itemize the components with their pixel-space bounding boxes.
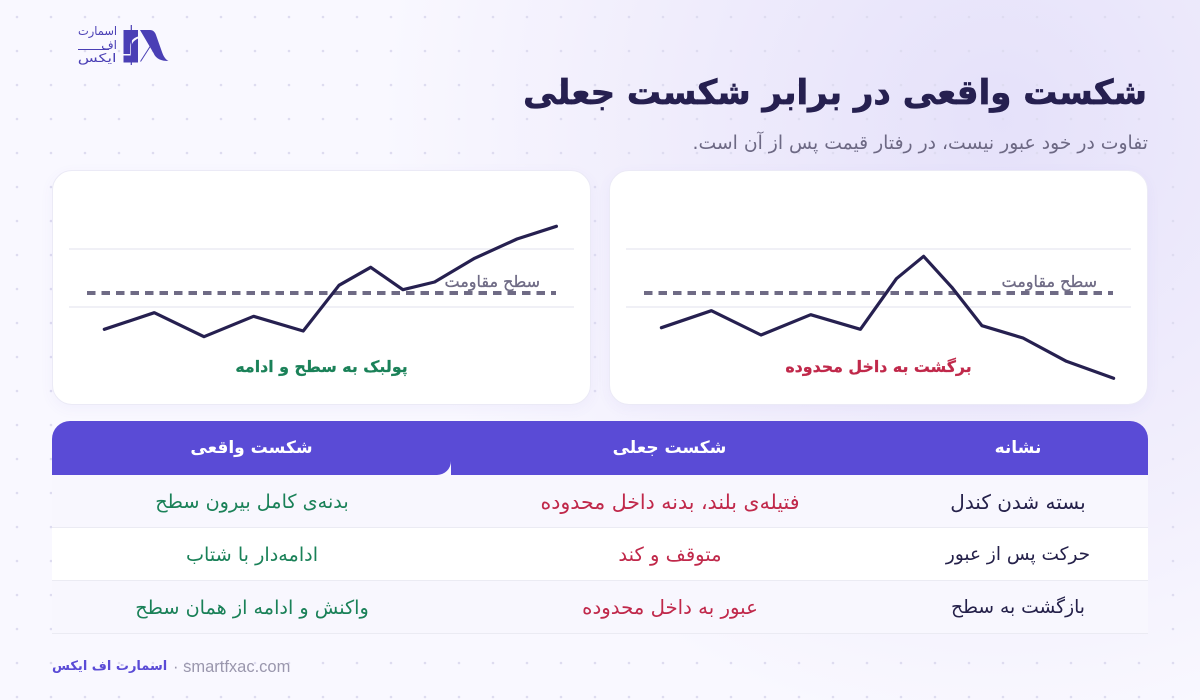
row: return to level: واکنش و ادامه از همان سطح <box>135 596 369 619</box>
table header <box>52 421 1148 475</box>
logo mark <box>124 25 168 65</box>
header cell: fake breakout: شکست جعلی <box>613 438 726 458</box>
row: candle close: بسته شدن کندل <box>950 490 1086 514</box>
chart: real breakout: سطح مقاومت <box>444 272 540 292</box>
footer <box>52 658 290 676</box>
row: move after crossing: حرکت پس از عبور <box>946 544 1090 565</box>
subtitle: تفاوت در خود عبور نیست، در رفتار قیمت پس از آن است. <box>692 133 1148 154</box>
header cell: real breakout <box>52 421 451 475</box>
logo wordmark: اسمارت <box>78 24 117 38</box>
chart: fake breakout: سطح مقاومت <box>1002 272 1097 292</box>
header cell: sign <box>888 421 1148 475</box>
logo wordmark: اف <box>101 38 117 52</box>
header cell: real breakout: شکست واقعی <box>190 438 313 458</box>
chart: fake breakout <box>626 248 1131 380</box>
row: candle close: بدنه‌ی کامل بیرون سطح <box>155 490 349 513</box>
row: return to level: عبور به داخل محدوده <box>582 596 758 619</box>
row: return to level: بازگشت به سطح <box>951 597 1085 618</box>
caption: fake breakout: برگشت به داخل محدوده <box>785 357 972 376</box>
panel: fake breakout <box>609 170 1148 405</box>
footer brand: اسمارت اف ایکس <box>52 659 167 674</box>
row: move after crossing: ادامه‌دار با شتاب <box>186 543 318 566</box>
footer url: · smartfxac.com <box>173 658 290 676</box>
header cell: sign: نشانه <box>995 438 1041 458</box>
logo wordmark: ایکس <box>78 51 117 65</box>
row: move after crossing <box>52 528 1148 581</box>
row: return to level <box>52 581 1148 634</box>
row: candle close: فتیله‌ی بلند، بدنه داخل محدوده <box>540 490 800 514</box>
logo <box>78 24 168 65</box>
row: move after crossing: متوقف و کند <box>618 543 722 566</box>
row: candle close <box>52 475 1148 528</box>
caption: real breakout: پولبک به سطح و ادامه <box>235 357 408 376</box>
header cell: fake breakout <box>451 421 888 475</box>
chart: real breakout <box>69 224 574 338</box>
panel: real breakout <box>52 170 591 405</box>
logo wordmark <box>78 24 117 65</box>
title: شکست واقعی در برابر شکست جعلی <box>523 73 1147 113</box>
